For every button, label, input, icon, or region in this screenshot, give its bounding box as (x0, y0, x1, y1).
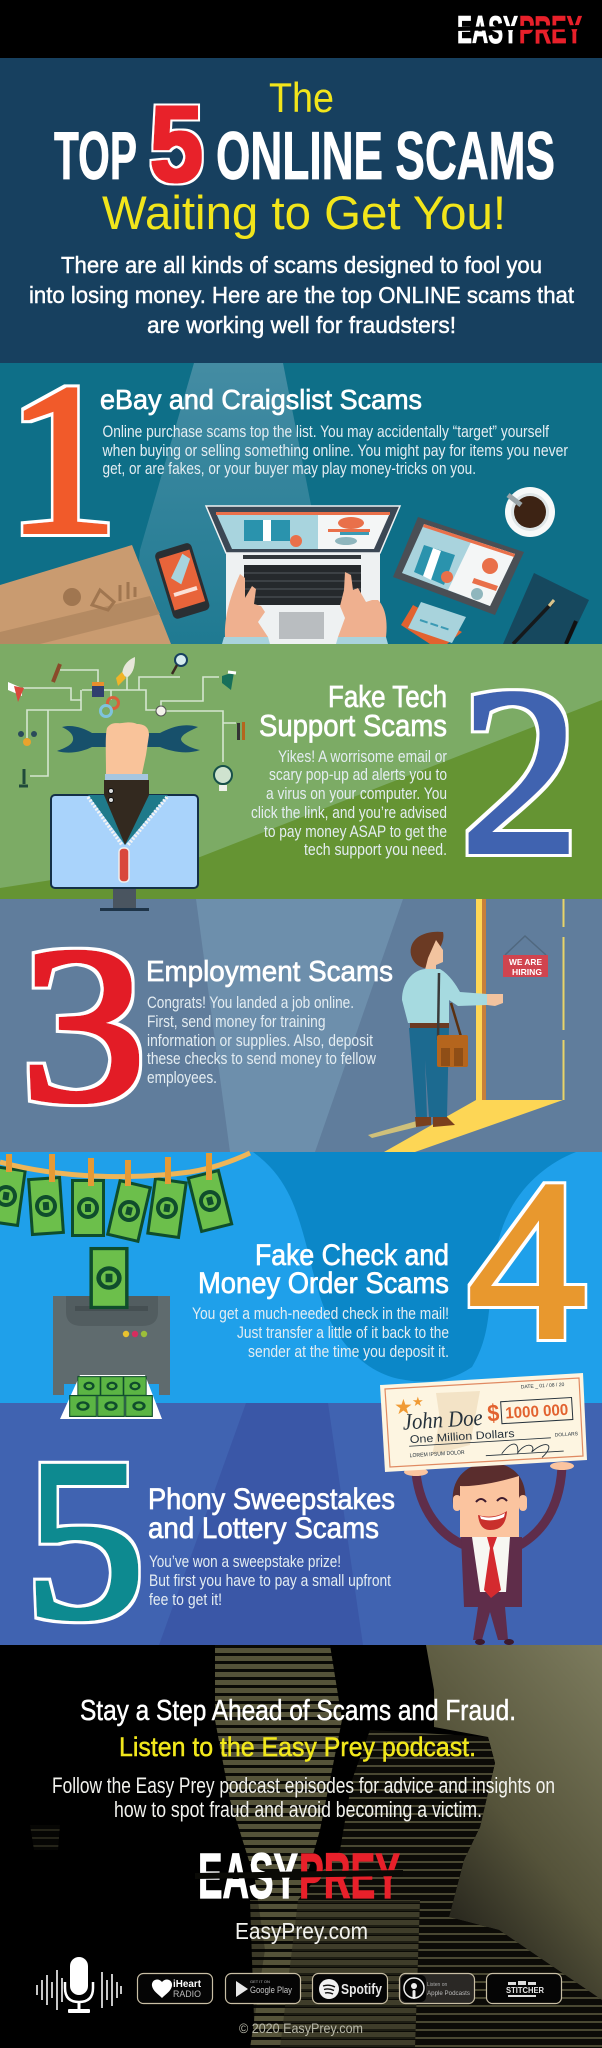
panel 5: phony sweepstakes and lottery scams (0, 1403, 602, 1668)
illustration: open doorway (368, 899, 564, 1152)
badge: Apple Podcasts (400, 1974, 474, 2004)
giant check: LOREM IPSUM DOLOR (410, 1450, 465, 1459)
icon: laptop with hands (206, 506, 400, 644)
numeral 1: 1 (6, 340, 118, 579)
panel 1: eBay and Craigslist scams (0, 340, 602, 644)
body text: fee to get it! (149, 1591, 222, 1609)
body text: these checks to send money to fellow (147, 1050, 376, 1068)
panel 4: fake check and money order scams (0, 1134, 602, 1419)
illustration: money machine (53, 1247, 170, 1419)
heading: eBay and Craigslist Scams (100, 384, 422, 415)
heading: stay a step ahead: Stay a Step Ahead of Scams and Fraud. (80, 1695, 516, 1727)
body text: You get a much-needed check in the mail! (192, 1305, 449, 1323)
man (404, 1462, 574, 1645)
diagram: circuit lines with tool icons (8, 654, 245, 791)
icon: coffee cup (505, 487, 555, 537)
giant check: One Million Dollars (409, 1428, 516, 1446)
panel: podcast footer (0, 1645, 602, 2048)
website: EasyPrey.com (235, 1918, 368, 1944)
icon: cardboard box (0, 545, 171, 644)
title panel (0, 58, 602, 363)
title line: The: The (269, 74, 334, 121)
icon: credit cards (401, 602, 466, 644)
body text: information or supplies. Also, deposit (147, 1032, 373, 1050)
giant check: John Doe (402, 1405, 483, 1435)
body text (192, 1305, 449, 1361)
body text: click the link, and you’re advised (251, 804, 447, 822)
intro text: are working well for fraudsters! (147, 312, 456, 338)
body text: You’ve won a sweepstake prize! (149, 1553, 341, 1571)
illustration: man holding giant check (380, 1373, 587, 1645)
giant check: DOLLARS (555, 1431, 579, 1439)
heading (198, 1239, 449, 1300)
intro text: There are all kinds of scams designed to fool you (61, 252, 542, 278)
badge: Google Play: GET IT ON (250, 1979, 270, 1984)
sign: we are hiring: WE ARE (509, 957, 542, 967)
body text: get, or are fakes, or your buyer may play money-tricks on you. (102, 460, 476, 478)
badge: Apple Podcasts: Apple Podcasts (427, 1991, 470, 1997)
body text: tech support you need. (304, 841, 447, 859)
body text (52, 1773, 555, 1822)
giant check (380, 1373, 587, 1472)
illustration: zipper and arm holding wrench (57, 722, 200, 882)
icon: phone (154, 542, 211, 620)
title line: Top 5 Online Scams: TOP (54, 118, 137, 194)
icon: notebook and pen (503, 573, 589, 644)
body text: a virus on your computer. You (266, 785, 447, 803)
heading: Employment Scams (146, 956, 393, 988)
body text: Yikes! A worrisome email or (278, 748, 447, 766)
panel 2: fake tech support scams (0, 638, 602, 911)
body text: Just transfer a little of it back to the (237, 1324, 449, 1342)
illustration: clothesline with bills (0, 1153, 250, 1243)
body text: Congrats! You landed a job online. (147, 994, 354, 1012)
giant check: ★ (412, 1394, 424, 1409)
logo: Easy Prey: PREY (299, 1840, 400, 1912)
heading: Fake Tech (328, 679, 447, 714)
body text: to pay money ASAP to get the (264, 823, 447, 841)
giant check: $ (487, 1400, 501, 1428)
panel 3: employment scams (0, 899, 602, 1152)
numeral 3: 3 (20, 900, 147, 1149)
body text: how to spot fraud and avoid becoming a victim. (114, 1797, 482, 1822)
body text: scary pop-up ad alerts you to (269, 766, 447, 784)
badge: Spotify: Spotify (341, 1981, 383, 1998)
body text (102, 423, 568, 478)
numeral 5: 5 (24, 1412, 145, 1668)
heading: Money Order Scams (198, 1267, 449, 1300)
copyright: © 2020 EasyPrey.com (239, 2020, 363, 2036)
badge: iHeart Radio: RADIO (173, 1989, 201, 2000)
background photo: silhouette (30, 1645, 602, 2048)
heading: and Lottery Scams (148, 1512, 379, 1545)
body text (251, 748, 447, 859)
body text: sender at the time you deposit it. (248, 1343, 449, 1361)
body text: But first you have to pay a small upfront (149, 1572, 391, 1590)
icon: microphone with waveform (37, 1957, 121, 2013)
header bar (0, 0, 602, 58)
numeral 4: 4 (468, 1134, 586, 1387)
giant check: ★ (394, 1396, 413, 1419)
numeral 2: 2 (460, 638, 580, 904)
badge: iHeart Radio (138, 1974, 212, 2004)
badge: iHeart Radio: iHeart (173, 1979, 202, 1990)
heading: listen to the podcast: Listen to the Easy Prey podcast. (119, 1732, 476, 1762)
heading (148, 1483, 395, 1545)
giant check: 1000 000 (505, 1402, 569, 1422)
badge: Apple Podcasts: Listen on (427, 1982, 448, 1988)
sign: we are hiring: HIRING (512, 967, 542, 977)
heading: Support Scams (259, 708, 447, 743)
intro text (29, 252, 574, 338)
badge: Stitcher: STITCHER (506, 1986, 544, 1995)
title line: Top 5 Online Scams (54, 83, 555, 204)
body text (147, 994, 376, 1087)
badge: Stitcher (486, 1974, 562, 2004)
badge: Spotify (312, 1974, 388, 2004)
icon: tablet (393, 517, 524, 615)
body text: employees. (147, 1069, 217, 1087)
wrench (57, 725, 200, 753)
sign: we are hiring (503, 936, 548, 977)
title line: Waiting to Get You: Waiting to Get You! (102, 186, 506, 239)
logo: Easy Prey: EASY (198, 1840, 298, 1912)
title line: Top 5 Online Scams: 5 (150, 83, 203, 204)
badge: Google Play: Google Play (250, 1985, 292, 1995)
intro text: into losing money. Here are the top ONLINE scams that (29, 282, 574, 308)
body text: First, send money for training (147, 1013, 326, 1031)
body text (149, 1553, 391, 1609)
heading: Fake Check and (255, 1239, 449, 1272)
heading (259, 679, 447, 743)
illustration: man at door (402, 932, 503, 1127)
badge: Google Play (226, 1974, 300, 2004)
heading: Phony Sweepstakes (148, 1483, 395, 1516)
illustration: monitor with stand (51, 795, 198, 911)
logo: Easy Prey: EASY (457, 9, 518, 52)
giant check: DATE _ 01 / 08 / 20 (521, 1382, 565, 1391)
